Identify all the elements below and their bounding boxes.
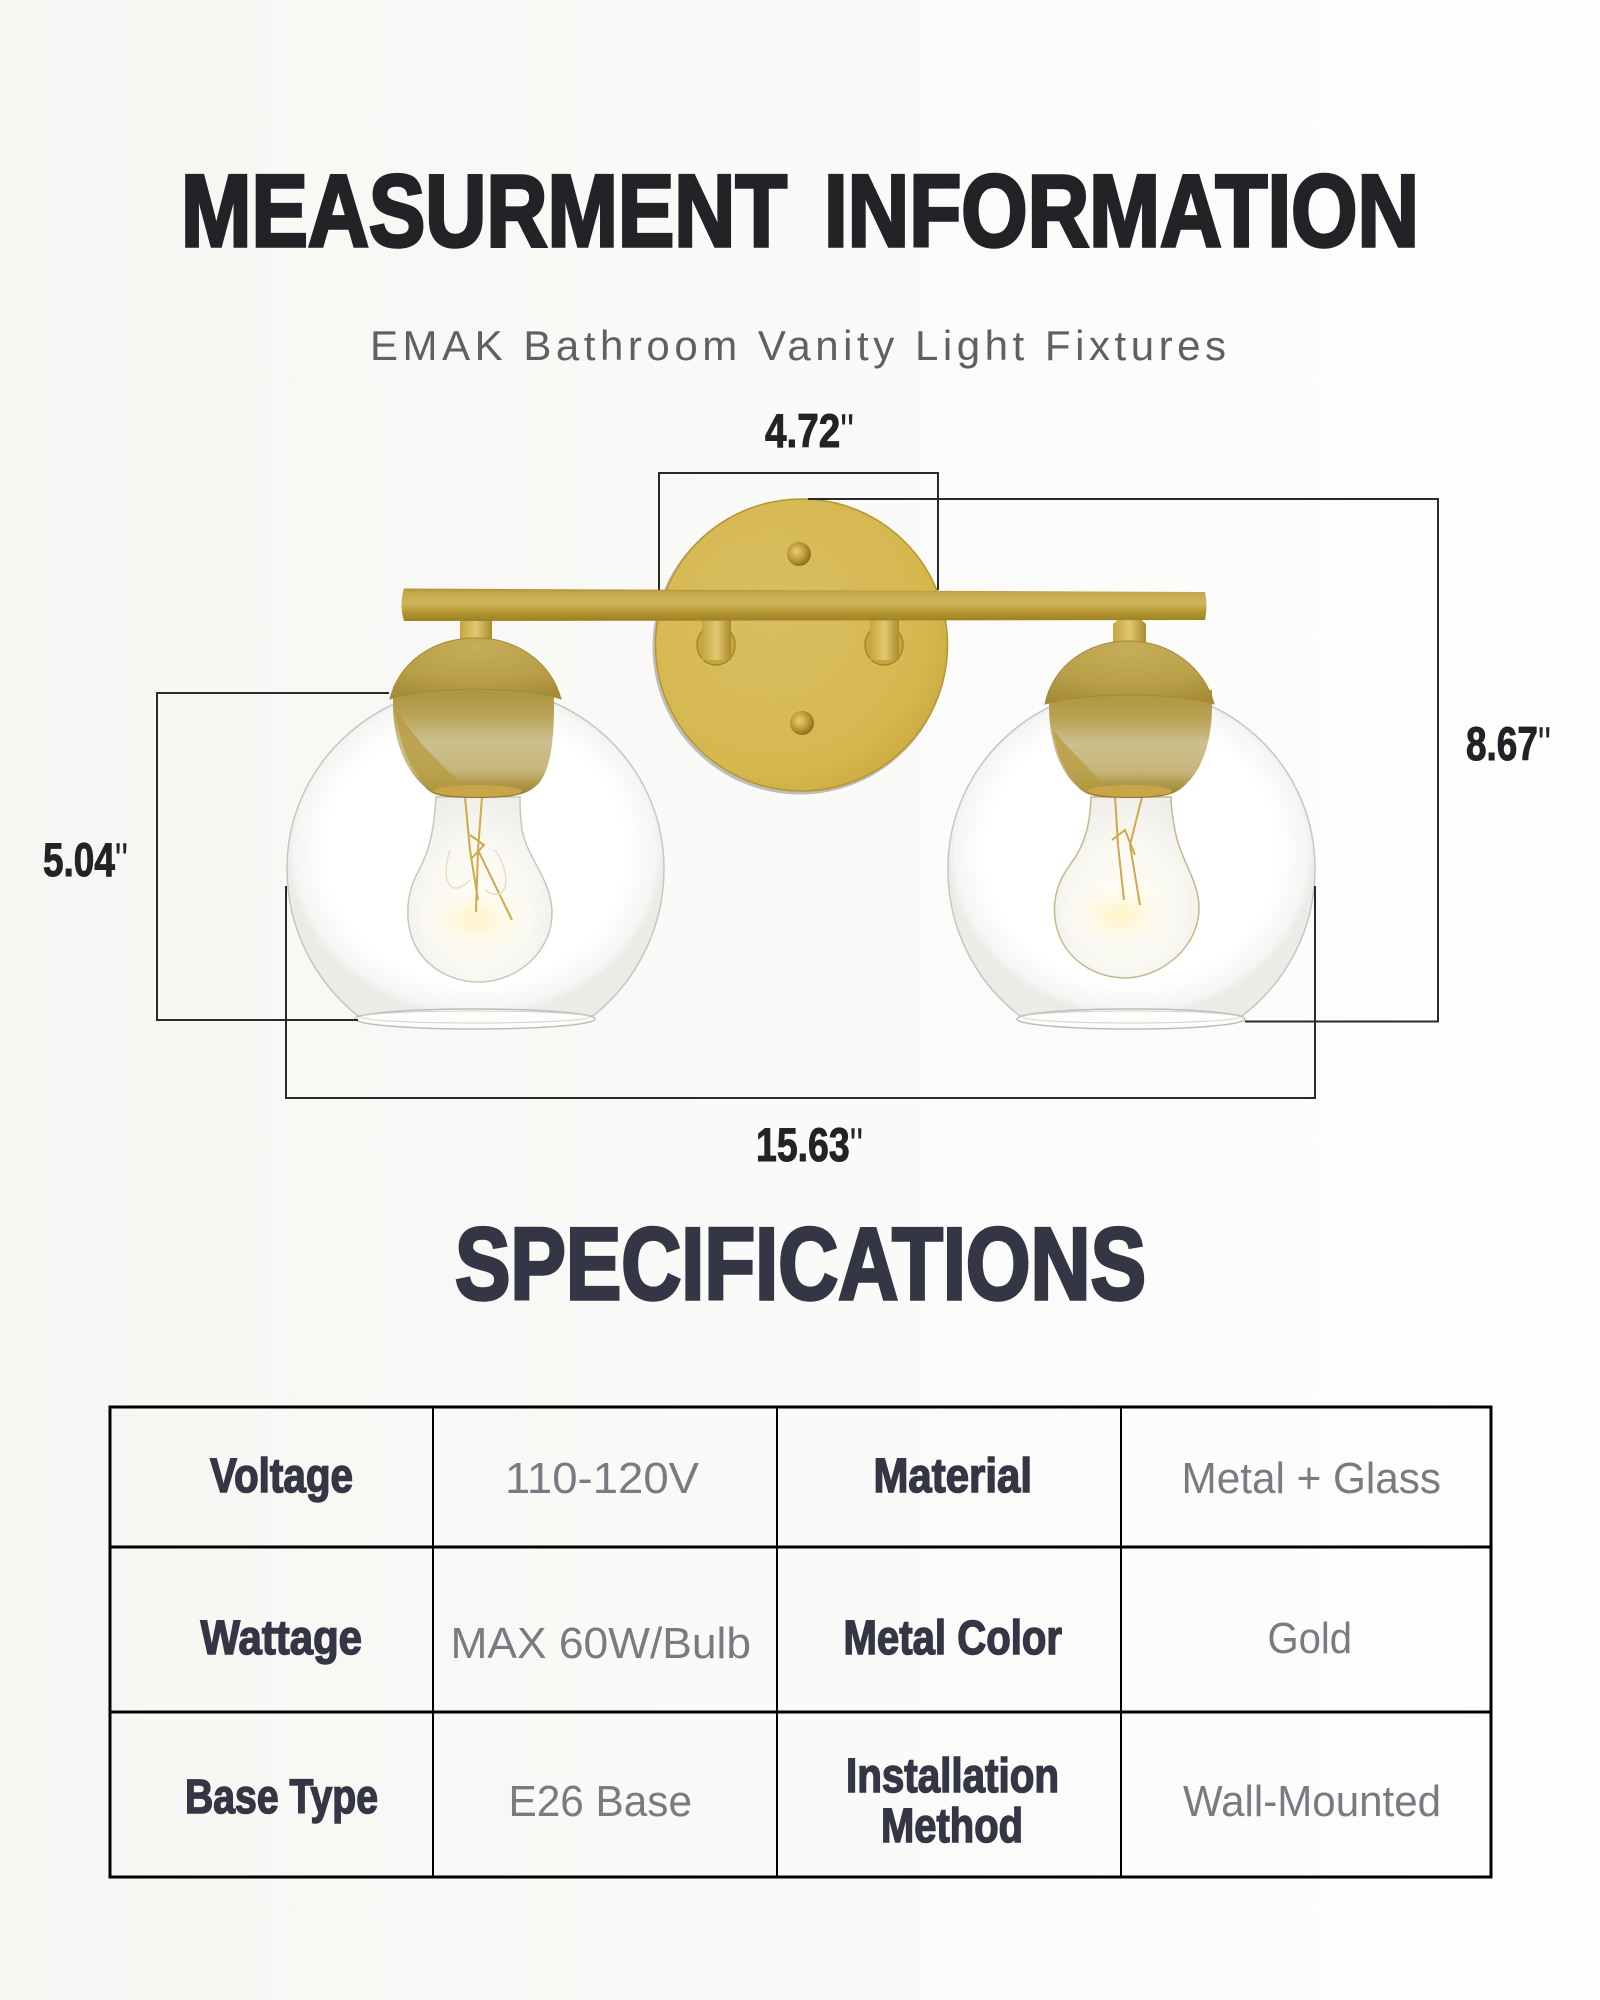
wall backplate — [652, 499, 948, 794]
left socket cup — [393, 686, 554, 798]
row labels: Metal Color — [844, 1612, 1062, 1665]
right glass globe — [948, 688, 1315, 1029]
dimension label: height: 8.67" — [1466, 717, 1551, 770]
dimension label: globe height: 5.04" — [43, 833, 128, 886]
row labels: Installation — [846, 1750, 1059, 1803]
row labels: Voltage — [210, 1450, 353, 1503]
left glass globe — [287, 686, 664, 1029]
right socket cup — [1049, 690, 1212, 798]
row values: Wall-Mounted — [1183, 1777, 1441, 1826]
title: MEASURMENT — [181, 154, 787, 268]
specifications table — [110, 1407, 1491, 1877]
row values — [450, 1454, 1441, 1826]
dimension label: overall width: 15.63" — [756, 1118, 863, 1171]
table grid — [110, 1407, 1491, 1877]
row labels: Wattage — [200, 1612, 362, 1665]
left stem — [460, 606, 492, 640]
dimension label: backplate width: 4.72" — [765, 404, 854, 457]
row values: E26 Base — [508, 1777, 692, 1826]
row values: 110-120V — [505, 1454, 700, 1503]
title: INFORMATION — [824, 154, 1419, 268]
heading: specifications: SPECIFICATIONS — [455, 1207, 1146, 1321]
row labels: Material — [874, 1450, 1032, 1503]
horizontal mounting bar — [402, 588, 1206, 621]
row labels: Base Type — [185, 1771, 378, 1824]
row values: MAX 60W/Bulb — [450, 1619, 751, 1668]
left bulb — [408, 797, 552, 982]
right bulb — [1054, 797, 1199, 978]
right stem — [1113, 612, 1146, 642]
row labels — [185, 1450, 1062, 1853]
title — [181, 154, 1419, 268]
product diagram: vanity light fixture — [287, 499, 1315, 1029]
row values: Metal + Glass — [1182, 1454, 1441, 1503]
right dome cap — [1045, 641, 1214, 704]
row values: Gold — [1268, 1614, 1352, 1663]
row labels: Method — [881, 1800, 1023, 1853]
left dome cap — [390, 638, 561, 699]
subtitle: EMAK Bathroom Vanity Light Fixtures — [370, 322, 1226, 369]
dimension lines — [157, 473, 1438, 1098]
